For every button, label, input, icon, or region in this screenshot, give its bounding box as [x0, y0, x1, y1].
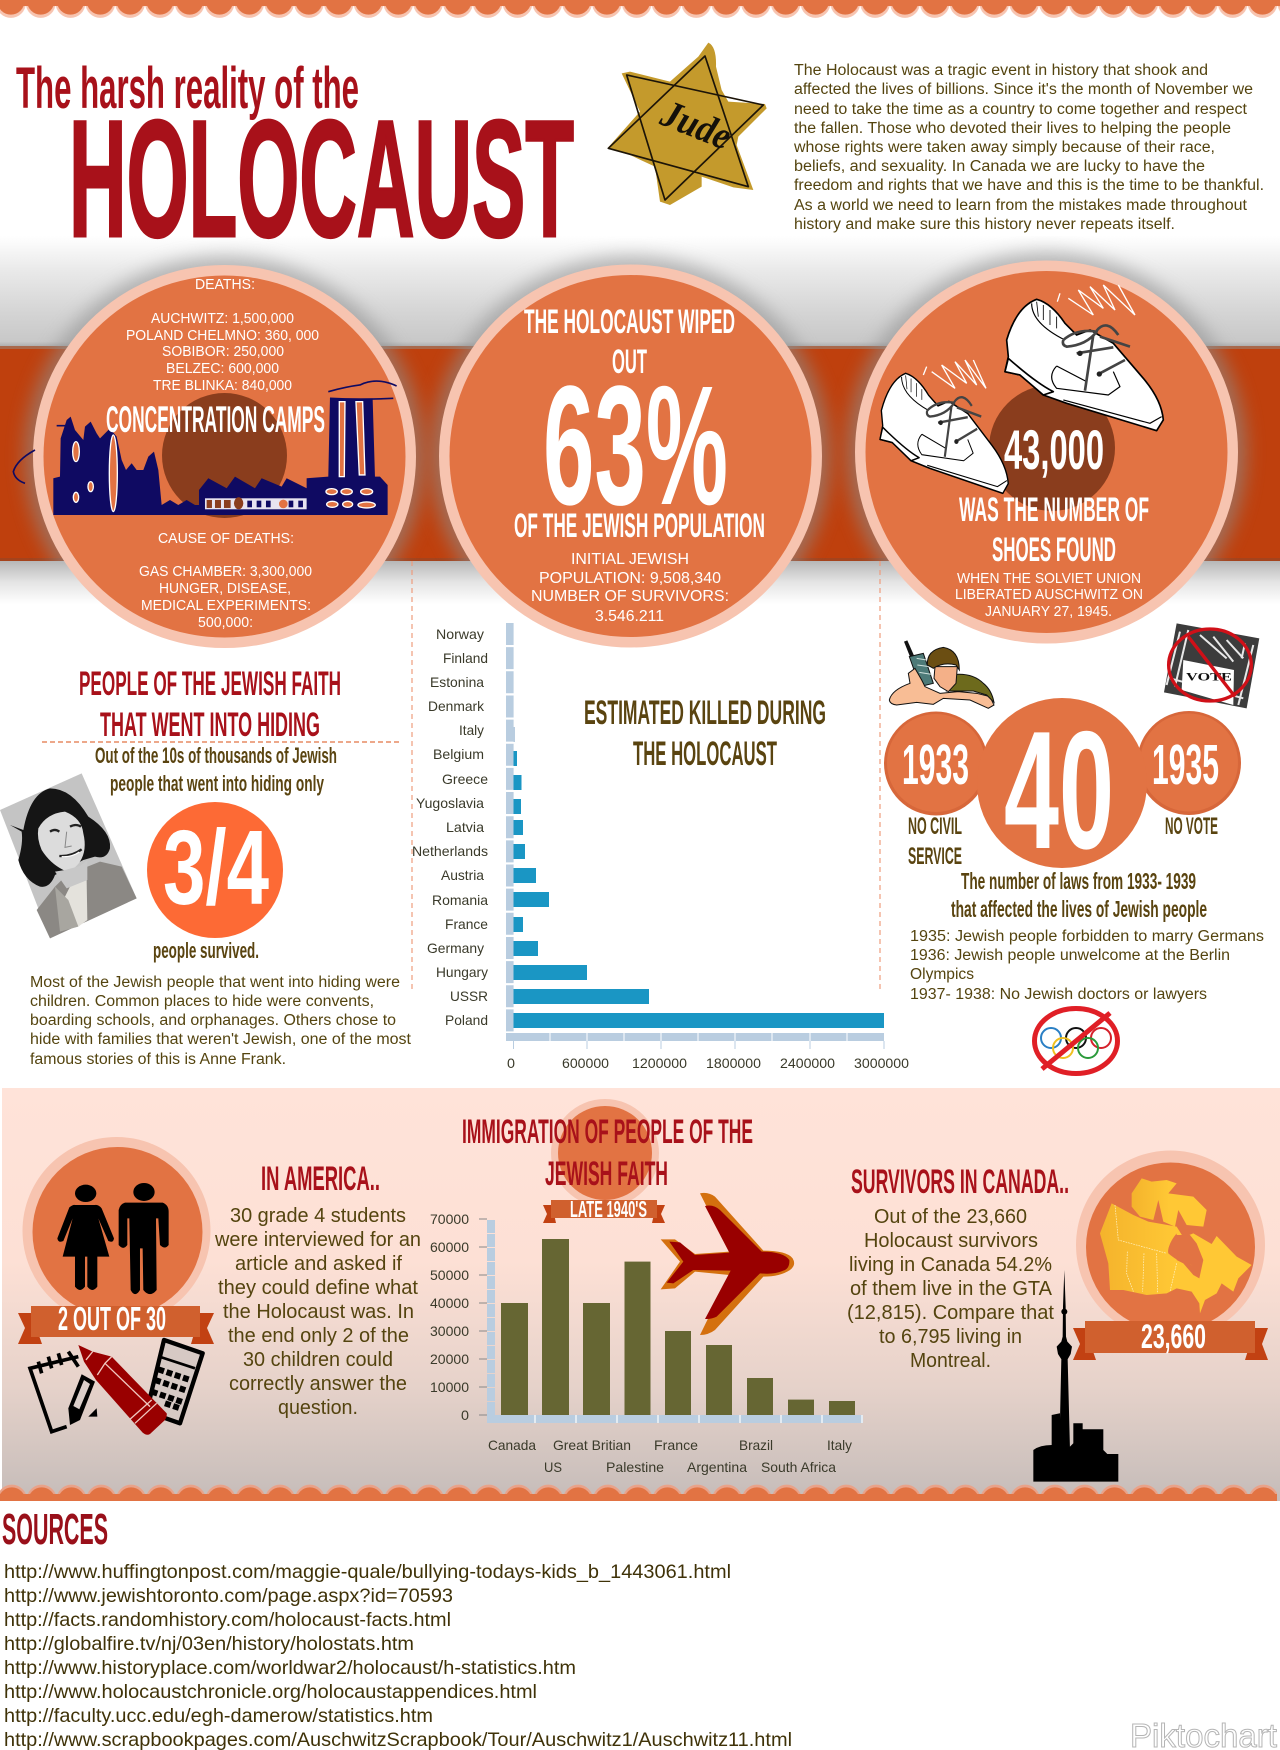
population details: NUMBER OF SURVIVORS: [531, 588, 729, 605]
ribbon: 23,660: 23,660 [1141, 1318, 1206, 1356]
cause of deaths list: GAS CHAMBER: 3,300,000 [139, 564, 312, 580]
bars [514, 727, 884, 1028]
heading: survivors in Canada: SURVIVORS IN CANADA.. [851, 1163, 1069, 1201]
panel: concentration camps circle: CONCENTRATION CAMPS [106, 399, 325, 440]
x axis labels [488, 1437, 852, 1475]
Canada paragraph: Montreal. [910, 1350, 991, 1372]
big stat: three quarters: 3/4 [163, 809, 269, 927]
heading: people of the Jewish faith [79, 665, 341, 744]
America paragraph [214, 1205, 421, 1419]
source links: http://faculty.ucc.edu/egh-damerow/statistics.htm [4, 1705, 433, 1727]
subheading: number of laws [951, 868, 1207, 922]
stat circle: 1935: 1935 [1152, 733, 1219, 797]
chart axes [506, 623, 884, 1049]
panel: laws against Jewish people: NO VOTE [1165, 813, 1218, 840]
stat circle: 1933: 1933 [902, 733, 969, 797]
source links: http://www.huffingtonpost.com/maggie-quale/bullying-todays-kids_b_1443061.html [4, 1561, 731, 1583]
intro paragraph: beliefs, and sexuality. In Canada we are lucky to have the [794, 158, 1205, 175]
x axis labels: Palestine [606, 1459, 664, 1475]
deaths list: DEATHS: [195, 277, 255, 293]
cause of deaths list: 500,000: [198, 615, 253, 631]
intro paragraph: whose rights were taken away simply because of their race, [793, 139, 1215, 156]
grey shading above the band [0, 236, 1280, 347]
hiding paragraph: Most of the Jewish people that went into hiding were [30, 974, 400, 991]
source links: http://www.historyplace.com/worldwar2/holocaust/h-statistics.htm [4, 1657, 576, 1679]
Canada paragraph: Out of the 23,660 [874, 1206, 1027, 1228]
y axis labels: 50000 [430, 1267, 469, 1283]
panel: survivors in Canada [847, 1150, 1268, 1482]
chart title [584, 694, 826, 773]
cause of deaths list: HUNGER, DISEASE, [159, 581, 291, 597]
y axis labels: 70000 [430, 1211, 469, 1227]
intro paragraph: need to take the time as a country to come together and respect [794, 101, 1248, 118]
big number: 43,000: 43,000 [1004, 418, 1104, 481]
cause of deaths list [139, 531, 312, 631]
heading: immigration of people of the Jewish faith: IMMIGRATION OF PEOPLE OF THE [462, 1113, 753, 1151]
laws list [910, 928, 1264, 1003]
heading: people of the Jewish faith: PEOPLE OF THE JEWISH FAITH [79, 665, 341, 703]
population details: POPULATION: 9,508,340 [539, 570, 721, 587]
source links: http://www.holocaustchronicle.org/holocaustappendices.html [4, 1681, 537, 1703]
hiding paragraph: children. Common places to hide were convents, [30, 993, 374, 1010]
chart title: THE HOLOCAUST [633, 735, 777, 773]
country labels: Estonina [430, 674, 484, 690]
Canada paragraph [847, 1206, 1054, 1372]
x axis labels: Brazil [739, 1437, 773, 1453]
y axis labels: 40000 [430, 1295, 469, 1311]
icon: CN Tower and skyline [1033, 1270, 1118, 1482]
Canada paragraph: of them live in the GTA [850, 1278, 1053, 1300]
panel: immigration chart [430, 1099, 863, 1475]
y axis labels: 20000 [430, 1351, 469, 1367]
laws list: 1937- 1938: No Jewish doctors or lawyers [910, 986, 1207, 1003]
heading: immigration of people of the Jewish faith [462, 1113, 753, 1193]
hiding paragraph: hide with families that weren't Jewish, one of the most [30, 1031, 412, 1048]
stat circle: 40 laws [977, 696, 1147, 884]
liberation note: WHEN THE SOLVIET UNION [957, 571, 1141, 587]
orange-red horizontal band [0, 346, 1280, 561]
country labels: Italy [459, 722, 484, 738]
Canada paragraph: Holocaust survivors [864, 1230, 1038, 1252]
x axis labels: Canada [488, 1437, 536, 1453]
icon: upper shoe [1005, 299, 1163, 431]
population details: 3.546.211 [595, 608, 664, 625]
country labels: Yugoslavia [416, 795, 484, 811]
ribbon: late 1940s [543, 1196, 665, 1223]
axis values: 1200000 [632, 1055, 687, 1071]
panel: sources [2, 1505, 792, 1750]
stat circle: 40 laws: 40 [1004, 696, 1114, 884]
country labels: Hungary [436, 964, 488, 980]
label: no civil service [908, 813, 962, 870]
panel: immigration background [2, 1088, 1280, 1501]
America paragraph: the Holocaust was. In [223, 1301, 414, 1323]
panel: laws against Jewish people [884, 623, 1264, 1074]
America paragraph: the end only 2 of the [228, 1325, 409, 1347]
x axis labels: Argentina [687, 1459, 747, 1475]
caption: people survived: people survived. [153, 938, 259, 963]
backdrop circle [551, 1099, 659, 1207]
panel: people in hiding [0, 665, 412, 1068]
hiding paragraph: boarding schools, and orphanages. Others chose to [30, 1012, 396, 1029]
country labels: USSR [450, 988, 488, 1004]
icon: no vote [1164, 623, 1259, 708]
hiding paragraph [30, 974, 412, 1068]
country labels: France [445, 916, 488, 932]
hiding paragraph: famous stories of this is Anne Frank. [30, 1051, 286, 1068]
deaths list [126, 277, 319, 394]
y axis labels: 30000 [430, 1323, 469, 1339]
icon: yellow Jude star: Jude [654, 91, 738, 159]
x axis labels: US [544, 1459, 562, 1475]
panel: concentration camps circle [13, 265, 416, 648]
big stat: three quarters [147, 802, 283, 938]
country labels [412, 626, 488, 1028]
laws list: Olympics [910, 966, 974, 983]
icon: soldier with radio [889, 640, 994, 708]
icon: two people in circle [22, 1137, 210, 1325]
soft grey halos behind circles [14, 242, 1257, 561]
heading: people of the Jewish faith: THAT WENT INTO HIDING [100, 706, 320, 744]
icon: shoe motion scribbles [923, 285, 1135, 388]
deaths list: TRE BLINKA: 840,000 [153, 378, 292, 394]
y axis labels: 10000 [430, 1379, 469, 1395]
label: no civil service: SERVICE [908, 843, 962, 870]
country labels: Romania [432, 892, 488, 908]
stat circle: 1933 [884, 712, 988, 816]
intro paragraph: the fallen. Those who devoted their lives to helping the people [794, 120, 1231, 137]
axis values: 3000000 [854, 1055, 909, 1071]
heading: was the number of shoes found [959, 491, 1149, 569]
Canada paragraph: to 6,795 living in [879, 1326, 1022, 1348]
subheading [95, 743, 337, 796]
laws list: 1935: Jewish people forbidden to marry Germans [910, 928, 1264, 945]
country labels: Finland [443, 650, 488, 666]
axis values: 600000 [562, 1055, 609, 1071]
icon: notepad, pencil, calculator [30, 1340, 203, 1435]
bars [501, 1239, 855, 1415]
x axis labels: Italy [827, 1437, 852, 1453]
deaths list: POLAND CHELMNO: 360, 000 [126, 328, 319, 344]
axis values: 0 [507, 1055, 515, 1071]
x axis labels: South Africa [761, 1459, 836, 1475]
country labels: Denmark [428, 698, 485, 714]
Canada paragraph: (12,815). Compare that [847, 1302, 1054, 1324]
icon: yellow Jude star [607, 43, 767, 205]
country labels: Poland [445, 1012, 488, 1028]
ribbon: late 1940s: LATE 1940'S [570, 1196, 647, 1222]
heading: the holocaust wiped out [524, 303, 735, 381]
label: no civil service: NO CIVIL [908, 813, 962, 840]
bar chart: estimated killed [412, 623, 909, 1071]
big number: 63%: 63% [543, 351, 728, 541]
text: HOLOCAUST [69, 87, 574, 272]
country labels: Greece [442, 771, 488, 787]
panel: sources: SOURCES [2, 1505, 108, 1554]
liberation note: JANUARY 27, 1945. [985, 604, 1112, 620]
y axis labels: 60000 [430, 1239, 469, 1255]
cause of deaths list: CAUSE OF DEATHS: [158, 531, 294, 547]
intro paragraph: freedom and rights that we have and this is the time to be thankful. [794, 177, 1264, 194]
cause of deaths list: MEDICAL EXPERIMENTS: [141, 598, 311, 614]
icon: no vote: VOTE [1186, 670, 1232, 684]
liberation note [955, 571, 1143, 620]
stat circle: 1935 [1137, 711, 1241, 815]
heading: the holocaust wiped out: OUT [612, 343, 647, 381]
source links: http://facts.randomhistory.com/holocaust-facts.html [4, 1609, 451, 1631]
America paragraph: article and asked if [235, 1253, 402, 1275]
axis values: 1800000 [706, 1055, 761, 1071]
intro paragraph [793, 62, 1264, 233]
subheading: of the Jewish population: OF THE JEWISH POPULATION [514, 507, 765, 545]
icon: Canada map in circle [1076, 1150, 1265, 1340]
country labels: Netherlands [412, 843, 488, 859]
intro paragraph: history and make sure this history never repeats itself. [794, 216, 1175, 233]
America paragraph: 30 grade 4 students [230, 1205, 406, 1227]
ribbon: 23,660 [1073, 1318, 1268, 1360]
intro paragraph: As a world we need to learn from the mistakes made throughout [794, 197, 1248, 214]
bottom scalloped border [0, 1484, 1277, 1501]
source links: http://www.jewishtoronto.com/page.aspx?id=70593 [4, 1585, 453, 1607]
axis values [507, 1055, 909, 1071]
intro paragraph: affected the lives of billions. Since it's the month of November we [794, 81, 1253, 98]
title [16, 56, 574, 272]
source links: http://globalfire.tv/nj/03en/history/holostats.htm [4, 1633, 414, 1655]
deaths list: BELZEC: 600,000 [166, 361, 279, 377]
x axis labels: France [654, 1437, 698, 1453]
America paragraph: they could define what [218, 1277, 418, 1299]
country labels: Latvia [446, 819, 484, 835]
liberation note: LIBERATED AUSCHWITZ ON [955, 587, 1143, 603]
photo: Anne Frank [0, 773, 137, 938]
country labels: Belgium [433, 746, 484, 762]
x axis labels: Great Britian [553, 1437, 631, 1453]
icon: no Olympics [1034, 1008, 1118, 1074]
ribbon: 2 out of 30: 2 OUT OF 30 [58, 1300, 166, 1337]
population details [531, 551, 729, 625]
y axis labels [430, 1211, 469, 1423]
ribbon: 2 out of 30 [18, 1300, 214, 1344]
deaths list: SOBIBOR: 250,000 [162, 344, 284, 360]
icon: camp factory silhouette [13, 381, 397, 515]
population details: INITIAL JEWISH [571, 551, 689, 568]
top scalloped border [0, 0, 1280, 20]
America paragraph: were interviewed for an [214, 1229, 421, 1251]
y axis labels: 0 [461, 1407, 469, 1423]
subheading: Out of the 10s of thousands of Jewish [95, 743, 337, 768]
heading: was the number of shoes found: SHOES FOUND [992, 531, 1116, 569]
heading: the holocaust wiped out: THE HOLOCAUST WIPED [524, 303, 735, 341]
chart title: ESTIMATED KILLED DURING [584, 694, 826, 732]
country labels: Austria [441, 867, 484, 883]
icon: airplane [661, 1193, 794, 1335]
Canada paragraph: living in Canada 54.2% [849, 1254, 1052, 1276]
America paragraph: correctly answer the [229, 1373, 407, 1395]
country labels: Germany [427, 940, 484, 956]
axis values: 2400000 [780, 1055, 835, 1071]
panel: 63 percent circle [439, 264, 822, 648]
country labels: Norway [436, 626, 484, 642]
source links [4, 1561, 792, 1750]
intro paragraph: The Holocaust was a tragic event in history that shook and [794, 62, 1208, 79]
heading: immigration of people of the Jewish faith: JEWISH FAITH [545, 1155, 668, 1193]
America paragraph: question. [278, 1397, 358, 1419]
panel: shoes circle [855, 260, 1238, 644]
America paragraph: 30 children could [243, 1349, 393, 1371]
panel: in America [18, 1137, 421, 1435]
laws list: 1936: Jewish people unwelcome at the Berlin [910, 947, 1230, 964]
title line: The harsh reality of the: The harsh reality of the [16, 56, 359, 121]
heading: in America: IN AMERICA.. [261, 1160, 380, 1198]
chart axes [479, 1219, 863, 1423]
subheading: people that went into hiding only [110, 771, 324, 796]
grey shading below the band [0, 560, 1280, 604]
icon: lower shoe [880, 373, 1008, 493]
deaths list: AUCHWITZ: 1,500,000 [151, 311, 294, 327]
